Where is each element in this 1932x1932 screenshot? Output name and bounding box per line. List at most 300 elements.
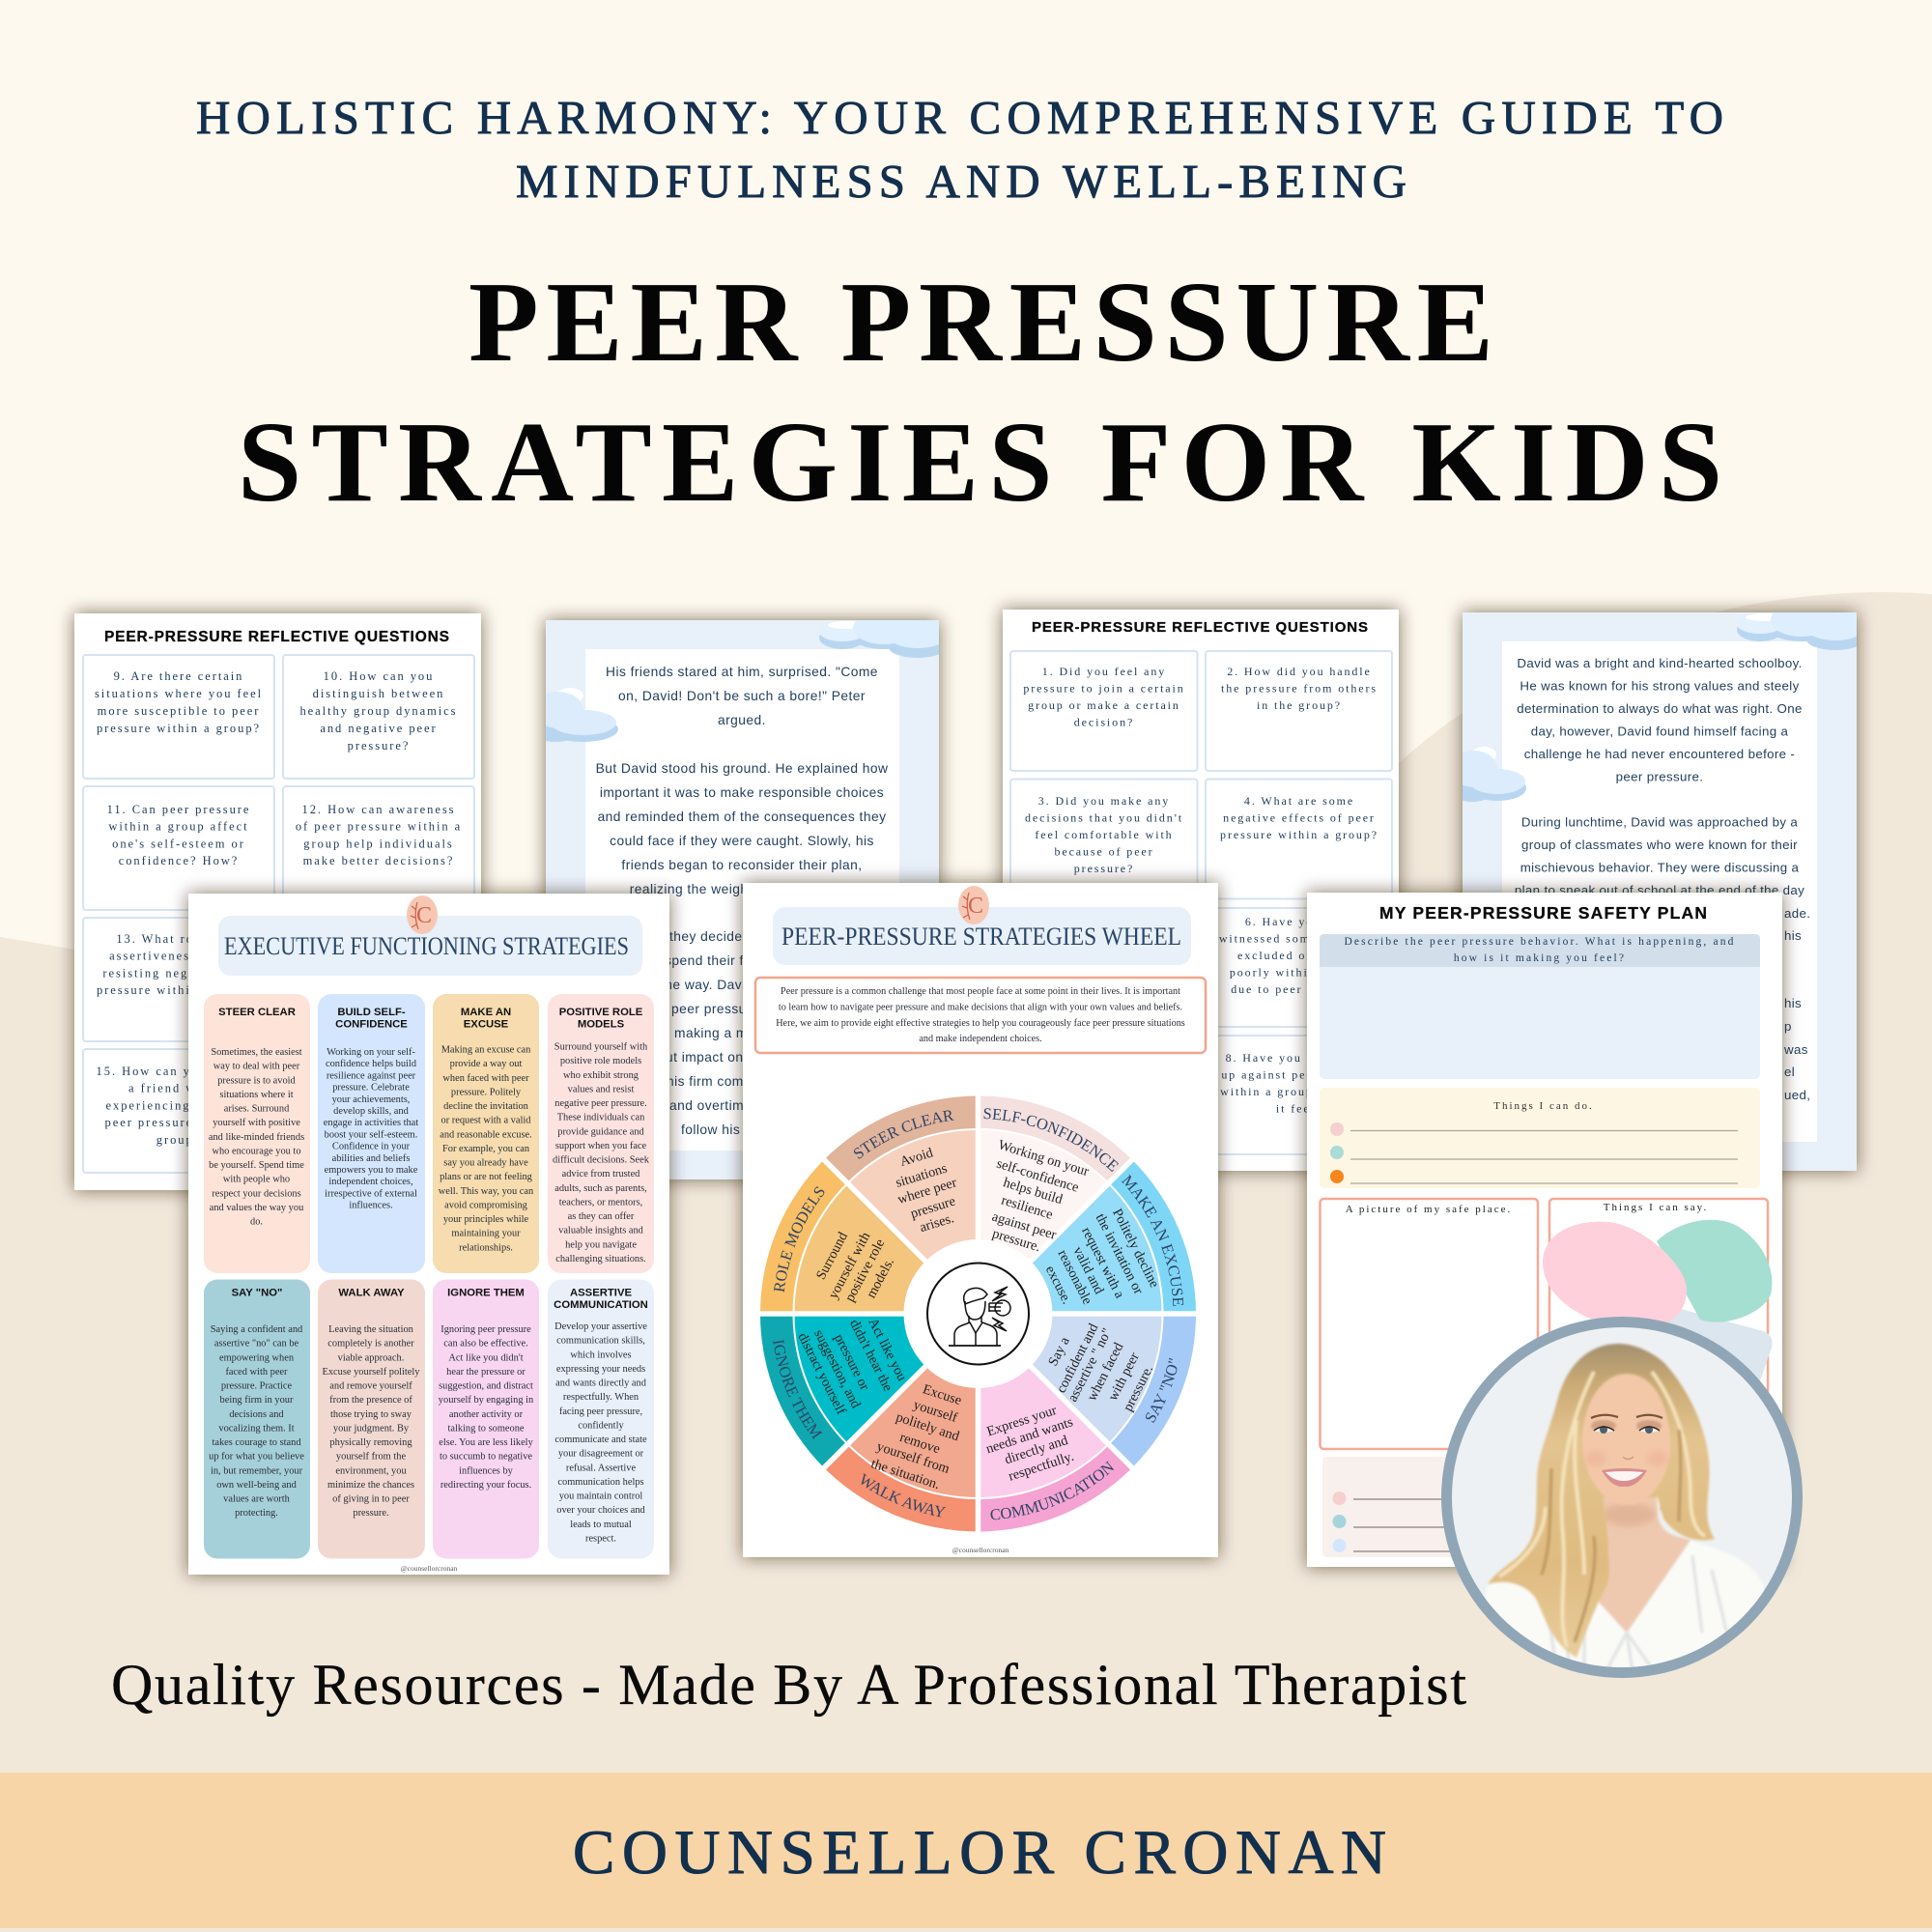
- card: make an excuse: when faced with peer: [442, 1073, 529, 1084]
- card: steer clear: be yourself. Spend time: [209, 1160, 304, 1171]
- card: make an excuse: decline the invitation: [443, 1101, 529, 1112]
- safe place box: [1320, 1199, 1538, 1449]
- card: assertive communication: confidently: [578, 1420, 624, 1431]
- card: build self-confidence: [318, 994, 425, 1273]
- wedge text: make an excuse: valid and: [1069, 1244, 1107, 1296]
- story text fragments: his: [1784, 928, 1802, 943]
- wedge text: ignore them: [794, 1316, 910, 1417]
- wedge text: walk away: yourself from: [875, 1439, 952, 1477]
- card: ignore them: IGNORE THEM: [447, 1287, 525, 1298]
- question text: due to peer pressure?: [1231, 982, 1368, 996]
- card: walk away: your judgment. By: [333, 1423, 410, 1434]
- card: assertive communication: leads to mutual: [570, 1520, 632, 1530]
- wedge text: self-confidence: self-confidence: [995, 1156, 1081, 1196]
- story text fragments: peer pressure: [671, 1002, 759, 1016]
- story text: important it was to make responsible choices: [600, 785, 884, 800]
- card: build self-confidence: independent choices,: [328, 1177, 413, 1187]
- card: build self-confidence: develop skills, and: [333, 1106, 410, 1117]
- card: positive role models: valuable insights and: [558, 1226, 644, 1236]
- heading band: [218, 916, 642, 976]
- card: walk away: from the presence of: [329, 1395, 412, 1406]
- question text: the pressure from others: [1221, 682, 1378, 696]
- things I can do panel: Things I can do.: [1493, 1100, 1594, 1112]
- card: walk away: completely is another: [327, 1339, 414, 1350]
- wedge text: say no: when faced: [1084, 1340, 1126, 1404]
- wedge text: role models: models.: [864, 1256, 897, 1301]
- intro callout: to learn how to navigate peer pressure and make decisions that align with your own values and beliefs.: [779, 1002, 1182, 1012]
- card: walk away: pressure.: [353, 1508, 389, 1519]
- wedge text: self-confidence: helps build: [1002, 1175, 1065, 1208]
- card: steer clear: who encourage you to: [212, 1146, 301, 1156]
- card: steer clear: and like-minded friends: [209, 1132, 304, 1143]
- page: story part one: [1451, 601, 1864, 1171]
- story text fragments: [1783, 906, 1810, 1102]
- story text: could face if they were caught. Slowly, his: [610, 834, 874, 848]
- icon: logo: C: [968, 894, 983, 919]
- wedge text: self-confidence: pressure.: [990, 1226, 1042, 1255]
- card: ignore them: Act like you didn't: [448, 1352, 524, 1363]
- card: say no: decisions and: [229, 1409, 284, 1420]
- card: walk away: minimize the chances: [327, 1480, 414, 1491]
- question text: feel comfortable with: [1035, 828, 1174, 841]
- question cards: [1010, 651, 1392, 1154]
- face: [1582, 1374, 1671, 1505]
- story text: on, David! Don't be such a bore!" Peter: [618, 689, 866, 703]
- story text: challenge he had never encountered before -: [1524, 747, 1795, 761]
- card: ignore them: Ignoring peer pressure: [440, 1324, 531, 1335]
- card: make an excuse: EXCUSE: [464, 1018, 509, 1030]
- question text: situations where you feel: [95, 687, 263, 700]
- story text fragments: ade.: [1784, 906, 1810, 921]
- question text: healthy group dynamics: [299, 704, 458, 718]
- question text: in the group?: [1257, 698, 1342, 712]
- story text fragments: p: [1784, 1019, 1792, 1034]
- card: steer clear: do.: [250, 1217, 263, 1228]
- card: assertive communication: Develop your assertive: [554, 1321, 647, 1332]
- question text: pressure within a group?: [97, 983, 261, 997]
- card: say no: SAY "NO": [232, 1287, 282, 1298]
- question text: pressure?: [1074, 862, 1134, 875]
- card: build self-confidence: engage in activities that: [324, 1118, 418, 1128]
- wedge text: say no: Say a: [1045, 1334, 1073, 1369]
- wedge text: communication: respectfully.: [1007, 1449, 1076, 1485]
- card: build self-confidence: irrespective of external: [325, 1188, 417, 1199]
- question text: poorly within a group: [1230, 966, 1369, 980]
- icon: logo: [407, 895, 438, 934]
- heading band: EXECUTIVE FUNCTIONING STRATEGIES: [224, 932, 629, 960]
- story text: But David stood his ground. He explained how: [596, 761, 888, 776]
- story text: and reminded them of the consequences they: [598, 810, 886, 824]
- story text fragments: the way. David: [661, 978, 753, 992]
- card: ignore them: else. You are less likely: [439, 1437, 534, 1448]
- card: positive role models: [548, 994, 654, 1273]
- card: make an excuse: or request with a valid: [441, 1116, 531, 1126]
- page heading: PEER-PRESSURE REFLECTIVE QUESTIONS: [1032, 619, 1368, 636]
- wedge text: communication: directly and: [1003, 1433, 1070, 1467]
- card: steer clear: situations where it: [219, 1090, 294, 1100]
- heading band: PEER-PRESSURE STRATEGIES WHEEL: [781, 922, 1181, 951]
- wedge text: self-confidence: against peer: [990, 1208, 1059, 1243]
- question text: it feel?: [1276, 1101, 1322, 1115]
- wedge text: self-confidence: resilience: [1000, 1193, 1055, 1223]
- page: reflective questions 9-16: [74, 613, 481, 1190]
- card: make an excuse: Making an excuse can: [441, 1045, 530, 1055]
- wedge text: walk away: [869, 1381, 963, 1492]
- things I can do panel: [1320, 1088, 1760, 1188]
- wheel ring labels: STEER CLEAR: [854, 1111, 954, 1159]
- wedge text: role models: yourself with: [826, 1230, 873, 1301]
- card: assertive communication: refusal. Assertive: [566, 1463, 636, 1473]
- subtitle: [196, 91, 1723, 208]
- wedge text: walk away: politely and: [894, 1409, 961, 1444]
- wedge text: say no: pressure.: [1121, 1363, 1156, 1414]
- shirt: [1484, 1542, 1765, 1667]
- card: say no: assertive "no" can be: [214, 1339, 299, 1350]
- wedge text: say no: confident and: [1054, 1321, 1101, 1396]
- card: walk away: [318, 1279, 425, 1559]
- question text: pressure?: [348, 739, 410, 753]
- card: say no: takes courage to stand: [212, 1437, 301, 1448]
- question text: up against peer pressure: [1221, 1068, 1378, 1082]
- question text: 12. How can awareness: [302, 803, 455, 816]
- card: ignore them: another activity or: [449, 1409, 524, 1420]
- card: build self-confidence: Working on your self-: [327, 1047, 415, 1058]
- card: ignore them: yourself by engaging in: [439, 1395, 534, 1406]
- card: assertive communication: you maintain control: [559, 1492, 642, 1502]
- card: steer clear: way to deal with peer: [213, 1062, 300, 1072]
- question text: 4. What are some: [1244, 794, 1354, 808]
- story text: [596, 665, 888, 896]
- speech blobs: [1642, 1306, 1773, 1401]
- footer handle: @counsellorcronan: [401, 1564, 458, 1573]
- story text: group of classmates who were known for their: [1521, 838, 1798, 852]
- question text: decisions that you didn't: [1025, 811, 1183, 825]
- card: build self-confidence: your achievements,: [332, 1094, 410, 1105]
- question text: a friend who is: [128, 1082, 229, 1095]
- wheel ring labels: MAKE AN EXCUSE: [1121, 1175, 1184, 1306]
- page: executive functioning strategies: [188, 894, 669, 1575]
- card: positive role models: provide guidance and: [557, 1126, 645, 1137]
- card: positive role models: advice from trusted: [562, 1169, 640, 1179]
- story text fragments: making a mis: [674, 1026, 758, 1040]
- wedge text: walk away: the situation.: [869, 1456, 942, 1492]
- icon: stressed person: [927, 1264, 1029, 1364]
- subtitle: HOLISTIC HARMONY: YOUR COMPREHENSIVE GUIDE TO: [196, 91, 1723, 144]
- wheel chart: [760, 1095, 1196, 1532]
- story text: mischievous behavior. They were discussing a: [1520, 860, 1800, 875]
- question text: assertiveness play in: [109, 950, 248, 963]
- card: make an excuse: [433, 994, 539, 1273]
- card: positive role models: adults, such as parents,: [554, 1183, 647, 1194]
- question text: 11. Can peer pressure: [107, 803, 250, 816]
- card: steer clear: Sometimes, the easiest: [211, 1047, 302, 1058]
- card: build self-confidence: abilities and beliefs: [332, 1153, 410, 1164]
- card: steer clear: STEER CLEAR: [218, 1007, 296, 1018]
- eyebrows and eyes: [1591, 1415, 1662, 1418]
- card: assertive communication: over your choices and: [556, 1505, 646, 1516]
- wedge text: ignore them: distract yourself: [794, 1330, 849, 1417]
- question text: one's self-esteem or: [112, 837, 245, 850]
- wheel ring labels: [773, 1108, 1184, 1520]
- wedge text: communication: needs and wants: [984, 1414, 1075, 1457]
- icon: logo: C: [416, 903, 432, 928]
- card: positive role models: negative peer pressure.: [554, 1098, 647, 1109]
- wedge text: self-confidence: [990, 1137, 1091, 1255]
- wedge text: say no: [1045, 1321, 1156, 1414]
- page heading: PEER-PRESSURE REFLECTIVE QUESTIONS: [104, 629, 449, 645]
- wedge text: steer clear: pressure: [909, 1194, 957, 1222]
- card: make an excuse: plans or are not feeling: [440, 1172, 532, 1182]
- card: say no: vocalizing them. It: [218, 1423, 295, 1434]
- wheel ring labels: ROLE MODELS: [774, 1186, 825, 1293]
- card: ignore them: to succumb to negative: [440, 1452, 532, 1463]
- card: walk away: and remove yourself: [329, 1381, 412, 1392]
- card: build self-confidence: BUILD SELF-: [337, 1007, 406, 1018]
- card: build self-confidence: Confidence in your: [332, 1142, 411, 1152]
- card: make an excuse: maintaining your: [451, 1229, 521, 1239]
- card: say no: being firm in your: [220, 1395, 294, 1406]
- card: ignore them: [433, 1279, 539, 1559]
- card: ignore them: suggestion, and distract: [439, 1381, 533, 1392]
- question text: pressure to join a certain: [1023, 682, 1185, 696]
- question text: 15. How can you support: [97, 1065, 261, 1078]
- story text: plan to sneak out of school at the end of the day: [1515, 883, 1804, 897]
- describe panel: [1320, 934, 1760, 1079]
- card: steer clear: [204, 994, 310, 1273]
- intro callout: Here, we aim to provide eight effective strategies to help you courageously face peer pressure situations: [776, 1018, 1185, 1029]
- subtitle: MINDFULNESS AND WELL-BEING: [516, 155, 1406, 208]
- footer band: [0, 1773, 1932, 1928]
- question text: witnessed someone being: [1219, 931, 1379, 945]
- card: positive role models: as they can offer: [568, 1211, 635, 1222]
- story text: David was a bright and kind-hearted schoolboy.: [1517, 656, 1803, 670]
- things I can say box: [1543, 1199, 1773, 1449]
- story text: friends began to reconsider their plan,: [621, 858, 863, 872]
- wedge text: make an excuse: excuse.: [1042, 1264, 1074, 1307]
- card: assertive communication: respectfully. When: [563, 1392, 639, 1403]
- card: assertive communication: your disagreement or: [558, 1449, 644, 1460]
- card: say no: [204, 1279, 310, 1559]
- story text: realizing the weight of their actions.: [630, 882, 854, 896]
- card: assertive communication: facing peer pressure,: [559, 1406, 642, 1417]
- card: positive role models: positive role models: [560, 1056, 641, 1066]
- card: walk away: those trying to sway: [330, 1409, 412, 1420]
- card: say no: faced with peer: [225, 1367, 288, 1378]
- title: PEER PRESSURE: [469, 258, 1493, 385]
- card: say no: empowering when: [219, 1352, 295, 1363]
- card: make an excuse: For example, you can: [442, 1144, 530, 1154]
- question text: [95, 669, 462, 1147]
- story text fragments: his: [1784, 996, 1802, 1010]
- wedge text: steer clear: Avoid: [898, 1145, 935, 1170]
- story text fragments: ued,: [1784, 1088, 1810, 1102]
- card: positive role models: POSITIVE ROLE: [559, 1007, 642, 1018]
- card: walk away: of giving in to peer: [332, 1494, 410, 1505]
- card: positive role models: who exhibit strong: [563, 1070, 639, 1081]
- bottom panel: [1322, 1457, 1612, 1557]
- intro callout: Peer pressure is a common challenge that most people face at some point in their lives. It is important: [781, 986, 1180, 997]
- story text: determination to always do what was right. One: [1517, 701, 1803, 716]
- page: safety plan: [1307, 893, 1782, 1567]
- story text: [1515, 656, 1804, 897]
- question text: peer pressure within a: [105, 1116, 252, 1129]
- page: strategies wheel: [729, 869, 1232, 1571]
- question text: negative effects of peer: [1223, 811, 1376, 825]
- story text fragments: and overtime: [669, 1098, 752, 1113]
- card: build self-confidence: confidence helps build: [326, 1059, 417, 1069]
- wedge text: steer clear: situations: [894, 1160, 950, 1191]
- icon: clouds: [533, 609, 947, 742]
- card: walk away: Leaving the situation: [328, 1324, 413, 1335]
- card: build self-confidence: pressure. Celebrate: [332, 1083, 410, 1094]
- card: assertive communication: expressing your needs: [556, 1364, 645, 1375]
- story text fragments: follow his: [681, 1122, 740, 1137]
- card: assertive communication: communicate and state: [554, 1435, 647, 1445]
- neck and chest: [1598, 1495, 1690, 1633]
- card: make an excuse: provide a way out: [450, 1059, 522, 1069]
- portrait photo: [1441, 1317, 1803, 1710]
- icon: clouds: [1463, 612, 1857, 802]
- card: say no: Saying a confident and: [211, 1324, 302, 1335]
- card: say no: up for what you believe: [209, 1452, 304, 1463]
- card: say no: protecting.: [235, 1508, 278, 1519]
- question text: 9. Are there certain: [114, 669, 243, 683]
- wedge text: walk away: Excuse: [921, 1381, 963, 1408]
- title: [238, 258, 1722, 526]
- card: ignore them: redirecting your focus.: [440, 1480, 531, 1491]
- wedge text: ignore them: pressure or: [831, 1331, 872, 1393]
- card: make an excuse: say you already have: [443, 1158, 528, 1169]
- question text: 8. Have you ever stood: [1226, 1051, 1373, 1065]
- story text: argued.: [718, 713, 766, 727]
- wedge text: say no: with peer: [1105, 1350, 1143, 1404]
- question text: group or make a certain: [1028, 698, 1180, 712]
- wedge text: steer clear: where peer: [895, 1175, 959, 1208]
- story text: During lunchtime, David was approached by a: [1521, 815, 1798, 829]
- question text: 10. How can you: [324, 669, 434, 683]
- icon: logo: [958, 886, 989, 924]
- card: walk away: yourself from the: [336, 1452, 406, 1463]
- describe panel: how is it making you feel?: [1454, 952, 1626, 964]
- intro callout: and make independent choices.: [919, 1034, 1042, 1044]
- heading band: [773, 907, 1191, 965]
- footer band: COUNSELLOR CRONAN: [573, 1818, 1386, 1888]
- card: positive role models: teachers, or mentors,: [559, 1197, 642, 1208]
- wedge text: communication: [984, 1403, 1076, 1485]
- wedge text: make an excuse: the invitation or: [1093, 1211, 1147, 1297]
- story text fragments: el: [1784, 1065, 1795, 1079]
- card: ignore them: talking to someone: [447, 1423, 525, 1434]
- wedge text: walk away: remove: [897, 1430, 942, 1457]
- wedge text: make an excuse: Politely decline: [1109, 1207, 1162, 1291]
- card: assertive communication: communication skills,: [556, 1336, 645, 1347]
- wedge text: ignore them: suggestion, and: [810, 1327, 864, 1410]
- question text: 13. What role does: [116, 932, 242, 946]
- card: positive role models: values and resist: [568, 1084, 634, 1094]
- card: steer clear: pressure is to avoid: [217, 1075, 297, 1086]
- card: walk away: Excuse yourself politely: [323, 1367, 420, 1378]
- card: make an excuse: avoid compromising: [444, 1200, 527, 1210]
- card: ignore them: hear the pressure or: [446, 1367, 526, 1378]
- question text: 3. Did you make any: [1038, 794, 1170, 808]
- question text: decision?: [1074, 715, 1134, 728]
- wedge text: self-confidence: Working on your: [996, 1137, 1091, 1179]
- wheel ring labels: IGNORE THEM: [773, 1339, 823, 1439]
- card: assertive communication: and wants directly and: [555, 1378, 647, 1389]
- question text: within a group? How did: [1220, 1085, 1378, 1098]
- card: make an excuse: pressure. Politely: [451, 1087, 522, 1097]
- hair: [1488, 1344, 1715, 1658]
- card: assertive communication: COMMUNICATION: [554, 1299, 648, 1311]
- question text: experiencing negative: [106, 1098, 251, 1112]
- wedge text: role models: Surround: [813, 1230, 851, 1282]
- card: walk away: viable approach.: [338, 1352, 404, 1363]
- page: story part two: [533, 609, 947, 1179]
- question text: of peer pressure within a: [296, 820, 462, 834]
- card: assertive communication: which involves: [570, 1350, 632, 1360]
- card: make an excuse: well. This way, you can: [439, 1186, 534, 1197]
- wedge text: ignore them: Act like you: [865, 1316, 910, 1383]
- card: positive role models: MODELS: [578, 1018, 625, 1030]
- footer handle: @counsellorcronan: [952, 1546, 1009, 1554]
- card: make an excuse: your principles while: [443, 1214, 529, 1225]
- card: steer clear: yourself with positive: [213, 1118, 300, 1128]
- card: steer clear: respect your decisions: [212, 1188, 301, 1199]
- card: positive role models: challenging situations.: [555, 1254, 646, 1264]
- card: build self-confidence: resilience against peer: [327, 1070, 416, 1081]
- story text fragments: they decided: [669, 929, 751, 944]
- wedge text: role models: positive role: [842, 1236, 888, 1304]
- wheel segments: [757, 1094, 1198, 1534]
- question text: within a group affect: [108, 820, 249, 834]
- card: positive role models: Surround yourself with: [554, 1041, 647, 1053]
- wedge text: make an excuse: [1042, 1207, 1162, 1307]
- card: make an excuse: relationships.: [459, 1242, 513, 1253]
- card: assertive communication: [548, 1279, 654, 1559]
- card: build self-confidence: influences.: [349, 1201, 393, 1211]
- card: positive role models: difficult decisions. Seek: [553, 1155, 650, 1166]
- card: walk away: WALK AWAY: [338, 1287, 405, 1298]
- card: steer clear: arises. Surround: [224, 1104, 290, 1115]
- question text: pressure within a group?: [97, 722, 261, 735]
- nose and mouth: [1623, 1457, 1634, 1459]
- wedge text: steer clear: [894, 1145, 959, 1236]
- card: build self-confidence: CONFIDENCE: [335, 1018, 408, 1030]
- card: positive role models: These individuals can: [557, 1113, 645, 1123]
- story text: peer pressure.: [1616, 769, 1703, 784]
- question text: because of peer: [1054, 844, 1154, 858]
- card: ignore them: can also be effective.: [443, 1339, 528, 1350]
- card: walk away: environment, you: [335, 1465, 407, 1476]
- wedge text: say no: assertive " no": [1065, 1326, 1115, 1405]
- things I can say box: Things I can say.: [1604, 1202, 1708, 1213]
- safe place box: A picture of my safe place.: [1346, 1204, 1512, 1215]
- wedge text: walk away: yourself: [911, 1397, 959, 1426]
- question text: [1023, 665, 1379, 1115]
- wheel ring labels: WALK AWAY: [862, 1473, 947, 1517]
- title: STRATEGIES FOR KIDS: [238, 398, 1722, 526]
- question text: more susceptible to peer: [98, 704, 260, 718]
- question text: group help individuals: [303, 837, 454, 850]
- card: say no: values are worth: [223, 1494, 291, 1505]
- wedge text: communication: Express your: [985, 1403, 1059, 1439]
- wedge text: steer clear: arises.: [918, 1210, 955, 1236]
- hair front: [1555, 1350, 1619, 1536]
- hair highlights: [1499, 1372, 1705, 1647]
- card: say no: in, but remember, your: [211, 1465, 303, 1476]
- card: ignore them: influences by: [459, 1465, 514, 1476]
- page heading: MY PEER-PRESSURE SAFETY PLAN: [1379, 903, 1707, 923]
